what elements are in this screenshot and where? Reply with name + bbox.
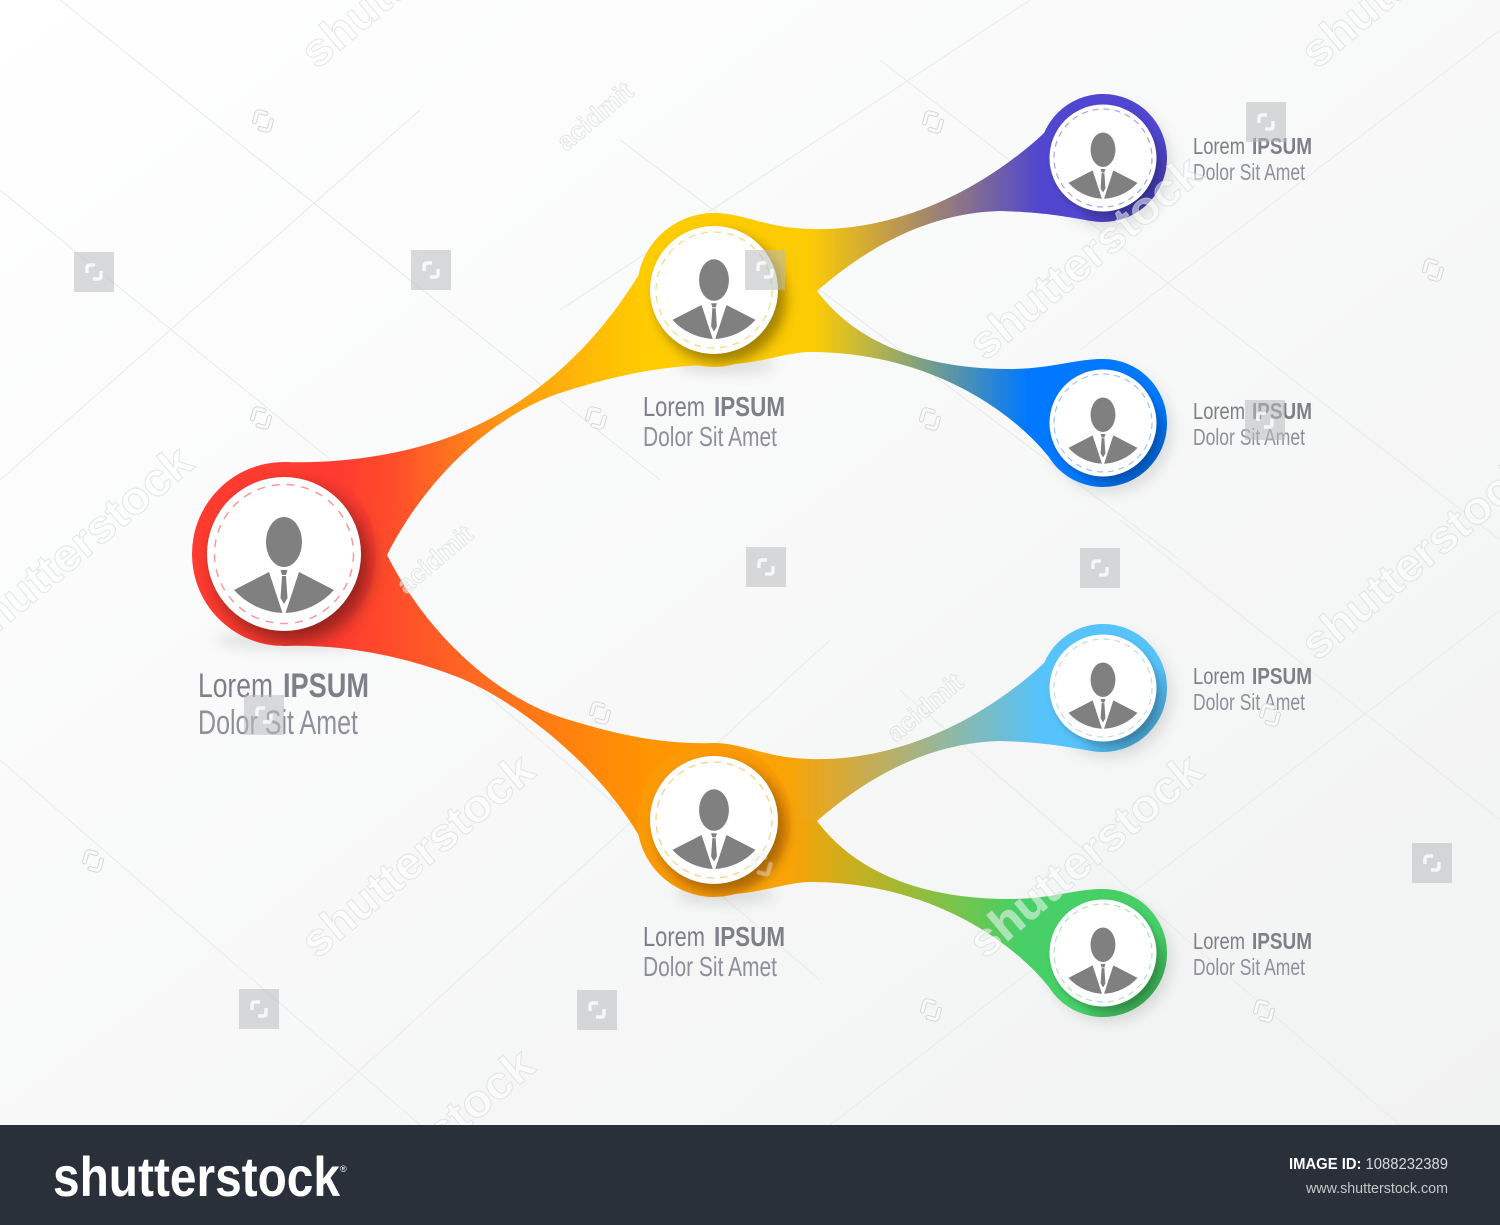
icon: person lower manager bbox=[672, 789, 756, 869]
label: blue node: Lorem bbox=[1193, 398, 1245, 424]
watermark overlay: shutterstock bbox=[958, 742, 1212, 968]
label: light blue node bbox=[1193, 663, 1312, 715]
label: blue node bbox=[1193, 398, 1312, 450]
label: upper manager: Lorem bbox=[643, 391, 705, 422]
node: upper manager bbox=[637, 213, 791, 367]
label: upper manager: Dolor Sit Amet bbox=[643, 421, 777, 452]
label: lower manager: Dolor Sit Amet bbox=[643, 951, 777, 982]
watermark overlay: shutterstock bbox=[290, 742, 544, 968]
label: green node: Lorem bbox=[1193, 928, 1245, 954]
label: root: IPSUM bbox=[283, 667, 369, 705]
watermark overlay: acidmit bbox=[881, 667, 969, 748]
watermark overlay: shutterstock bbox=[958, 144, 1212, 370]
icon: person upper manager bbox=[672, 259, 756, 339]
ribbon: root to upper manager bbox=[284, 213, 716, 560]
label: light blue node: Dolor Sit Amet bbox=[1193, 689, 1305, 715]
node: lower manager bbox=[637, 743, 791, 897]
footer registered mark: ® bbox=[340, 1164, 347, 1174]
footer image id: IMAGE ID: 1088232389 bbox=[1289, 1156, 1448, 1173]
footer logo: shutterstock bbox=[53, 1145, 341, 1208]
tree top branch ribbons bbox=[284, 94, 1103, 560]
tree bottom branch ribbons bbox=[284, 548, 1103, 1017]
ribbon: upper manager to blue node bbox=[712, 285, 1103, 487]
ribbon: root to lower manager bbox=[284, 548, 716, 897]
icon: person green bbox=[1068, 927, 1138, 994]
label: root: Dolor Sit Amet bbox=[198, 704, 358, 742]
label: blue node: IPSUM bbox=[1252, 398, 1312, 424]
label: upper manager: IPSUM bbox=[714, 391, 785, 422]
icon: person blue bbox=[1068, 397, 1138, 464]
label: light blue node: Lorem bbox=[1193, 663, 1245, 689]
label: upper manager bbox=[643, 391, 785, 452]
label: purple node: Dolor Sit Amet bbox=[1193, 159, 1305, 185]
watermark overlay: acidmit bbox=[551, 76, 639, 157]
label: light blue node: IPSUM bbox=[1252, 663, 1312, 689]
label: blue node: Dolor Sit Amet bbox=[1193, 424, 1305, 450]
node: green bbox=[1039, 889, 1167, 1017]
label: lower manager: Lorem bbox=[643, 921, 705, 952]
label: green node: IPSUM bbox=[1252, 928, 1312, 954]
label: green node: Dolor Sit Amet bbox=[1193, 954, 1305, 980]
icon: person purple bbox=[1068, 132, 1138, 199]
node: purple bbox=[1039, 94, 1167, 222]
icon: person root bbox=[234, 517, 334, 613]
ribbon: lower manager to green node bbox=[712, 815, 1103, 1017]
ribbon: lower manager to light blue node bbox=[712, 624, 1103, 830]
ribbon soft outer shadows bbox=[215, 103, 1171, 1022]
label: green node bbox=[1193, 928, 1312, 980]
node: blue bbox=[1039, 359, 1167, 487]
label: root bbox=[198, 667, 369, 742]
watermark overlay: acidmit bbox=[391, 519, 479, 600]
ribbon: upper manager to purple node bbox=[712, 94, 1103, 300]
label: purple node: Lorem bbox=[1193, 133, 1245, 159]
footer bar bbox=[0, 1125, 1500, 1225]
node: root bbox=[192, 462, 376, 646]
label: purple node: IPSUM bbox=[1252, 133, 1312, 159]
label: root: Lorem bbox=[198, 667, 273, 705]
node: light blue bbox=[1039, 624, 1167, 752]
footer url: www.shutterstock.com bbox=[1305, 1180, 1448, 1197]
icon: person light blue bbox=[1068, 662, 1138, 729]
label: purple node bbox=[1193, 133, 1312, 185]
label: lower manager: IPSUM bbox=[714, 921, 785, 952]
label: lower manager bbox=[643, 921, 785, 982]
